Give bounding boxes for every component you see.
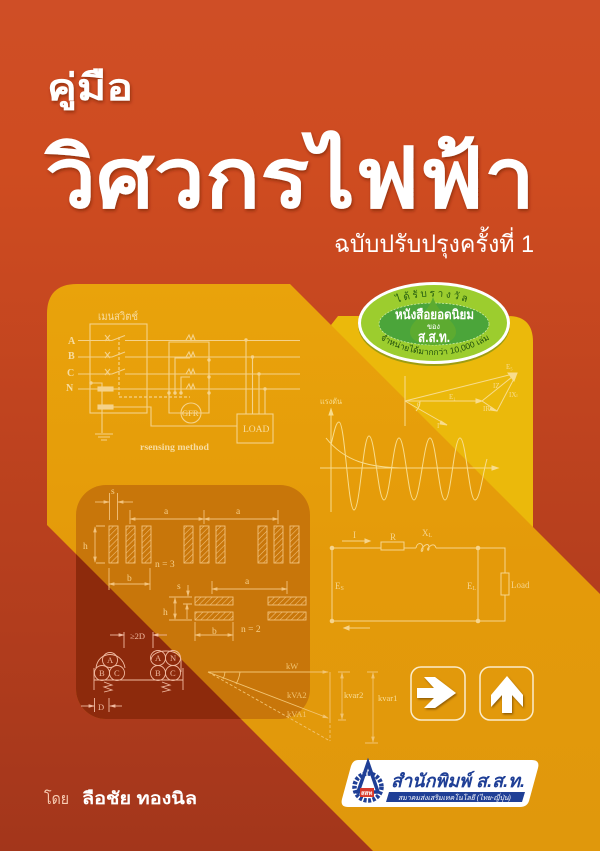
badge: best seller award: ได้รับรางวัล: [394, 290, 467, 302]
diagram: RL circuit: E: [335, 581, 340, 591]
text: author: ลือชัย ทองนิล: [82, 788, 197, 808]
logo: publisher: สมาคมส่งเสริมเทคโนโลยี (ไทย-ญี่ปุ่น): [398, 792, 511, 802]
logo: publisher: [342, 760, 538, 807]
diagram: power factor triangle: kW: [286, 661, 298, 671]
diagram: main switch wiring: rsensing method: [140, 443, 210, 453]
chart: voltage sine wave: [320, 397, 498, 512]
diagram: phasor vectors: E₅: [506, 363, 513, 371]
diagram: busbar spacing n=2: s: [177, 582, 181, 592]
diagram: cable spacing: C: [114, 668, 120, 678]
text: author: โดย: [44, 789, 69, 808]
diagram: phasor vectors: IR: [483, 405, 490, 413]
diagram: main switch wiring: A: [68, 336, 76, 347]
text: author: [44, 788, 197, 808]
diagram: cable spacing: A: [155, 653, 162, 663]
diagram: phasor vectors: IZ: [493, 382, 500, 390]
diagram: RL circuit: X: [422, 528, 428, 538]
diagram: busbar spacing n=3: [83, 487, 299, 590]
diagram: RL circuit: [330, 528, 530, 630]
subtitle: edition: ฉบับปรับปรุงครั้งที่ 1: [334, 226, 534, 259]
title: small heading: คู่มือ: [47, 67, 133, 111]
diagram: phasor vectors: IXₗ: [509, 391, 518, 399]
diagram: busbar spacing n=3: s: [111, 487, 115, 497]
badge: best seller award: [358, 282, 510, 366]
diagram: main switch wiring: GFR: [182, 408, 199, 418]
diagram: power factor triangle: [208, 661, 397, 743]
diagram: main switch wiring: เมนสวิตช์: [98, 310, 138, 323]
logo: publisher: สำนักพิมพ์ ส.ส.ท.: [391, 770, 525, 791]
diagram: busbar spacing n=3: b: [127, 574, 132, 584]
diagram: main switch wiring: C: [67, 368, 74, 379]
icon: right arrow button: [411, 667, 465, 720]
diagram: busbar spacing n=3: n = 3: [155, 560, 175, 570]
diagram: RL circuit: Load: [511, 580, 530, 590]
panel: yellow back card: [331, 316, 533, 530]
panel: orange diagonal band: [47, 284, 600, 851]
diagram: cable spacing: ≥2D: [130, 631, 145, 641]
diagram: main switch wiring: LOAD: [243, 425, 270, 435]
diagram: main switch wiring: [66, 310, 300, 453]
diagram: busbar spacing n=2: b: [212, 627, 217, 637]
diagram: RL circuit: S: [340, 586, 344, 592]
diagram: cable spacing: N: [170, 653, 176, 663]
title: main heading: วิศวกรไฟฟ้า: [43, 130, 535, 225]
diagram: cable spacing: C: [170, 668, 176, 678]
diagram: RL circuit: E: [467, 581, 472, 591]
diagram: phasor vectors: θ: [417, 401, 421, 409]
diagram: RL circuit: L: [472, 586, 476, 592]
diagram: cable spacing: [81, 631, 183, 712]
icon: up arrow button: [480, 667, 533, 720]
diagram: RL circuit: L: [428, 533, 432, 539]
diagram: power factor triangle: kVA1: [287, 709, 307, 719]
badge: best seller award: ของ: [427, 322, 440, 331]
diagram: phasor vectors: [405, 363, 518, 430]
panel: dark rounded overlay: [76, 485, 310, 719]
badge: best seller award: จำหน่ายได้มากกว่า 10,000 เล่ม: [382, 334, 489, 355]
diagram: power factor triangle: kvar1: [378, 693, 397, 703]
diagram: RL circuit: R: [390, 532, 396, 542]
diagram: cable spacing: B: [155, 668, 161, 678]
icon: gear and triangle emblem: [354, 763, 382, 800]
diagram: power factor triangle: kvar2: [344, 690, 363, 700]
diagram: cable spacing: A: [107, 655, 114, 665]
badge: best seller award: หนังสือยอดนิยม: [395, 307, 474, 322]
badge: best seller award: ส.ส.ท.: [418, 329, 450, 346]
diagram: phasor vectors: I: [437, 422, 440, 430]
chart: voltage sine wave: แรงดัน: [320, 397, 342, 406]
diagram: cable spacing: D: [98, 702, 104, 712]
diagram: busbar spacing n=2: n = 2: [241, 625, 261, 635]
diagram: power factor triangle: kVA2: [287, 690, 307, 700]
diagram: busbar spacing n=2: h: [163, 608, 168, 618]
diagram: RL circuit: I: [353, 530, 356, 540]
diagram: cable spacing: B: [99, 668, 105, 678]
diagram: main switch wiring: B: [68, 351, 75, 362]
icon: gear and triangle emblem: สสท: [361, 790, 372, 797]
diagram: busbar spacing n=3: a: [236, 507, 241, 517]
diagram: main switch wiring: N: [66, 383, 74, 394]
diagram: busbar spacing n=3: h: [83, 542, 88, 552]
diagram: busbar spacing n=2: [163, 577, 306, 641]
diagram: phasor vectors: E₁: [449, 393, 456, 401]
diagram: busbar spacing n=3: a: [164, 507, 169, 517]
diagram: busbar spacing n=2: a: [245, 577, 250, 587]
